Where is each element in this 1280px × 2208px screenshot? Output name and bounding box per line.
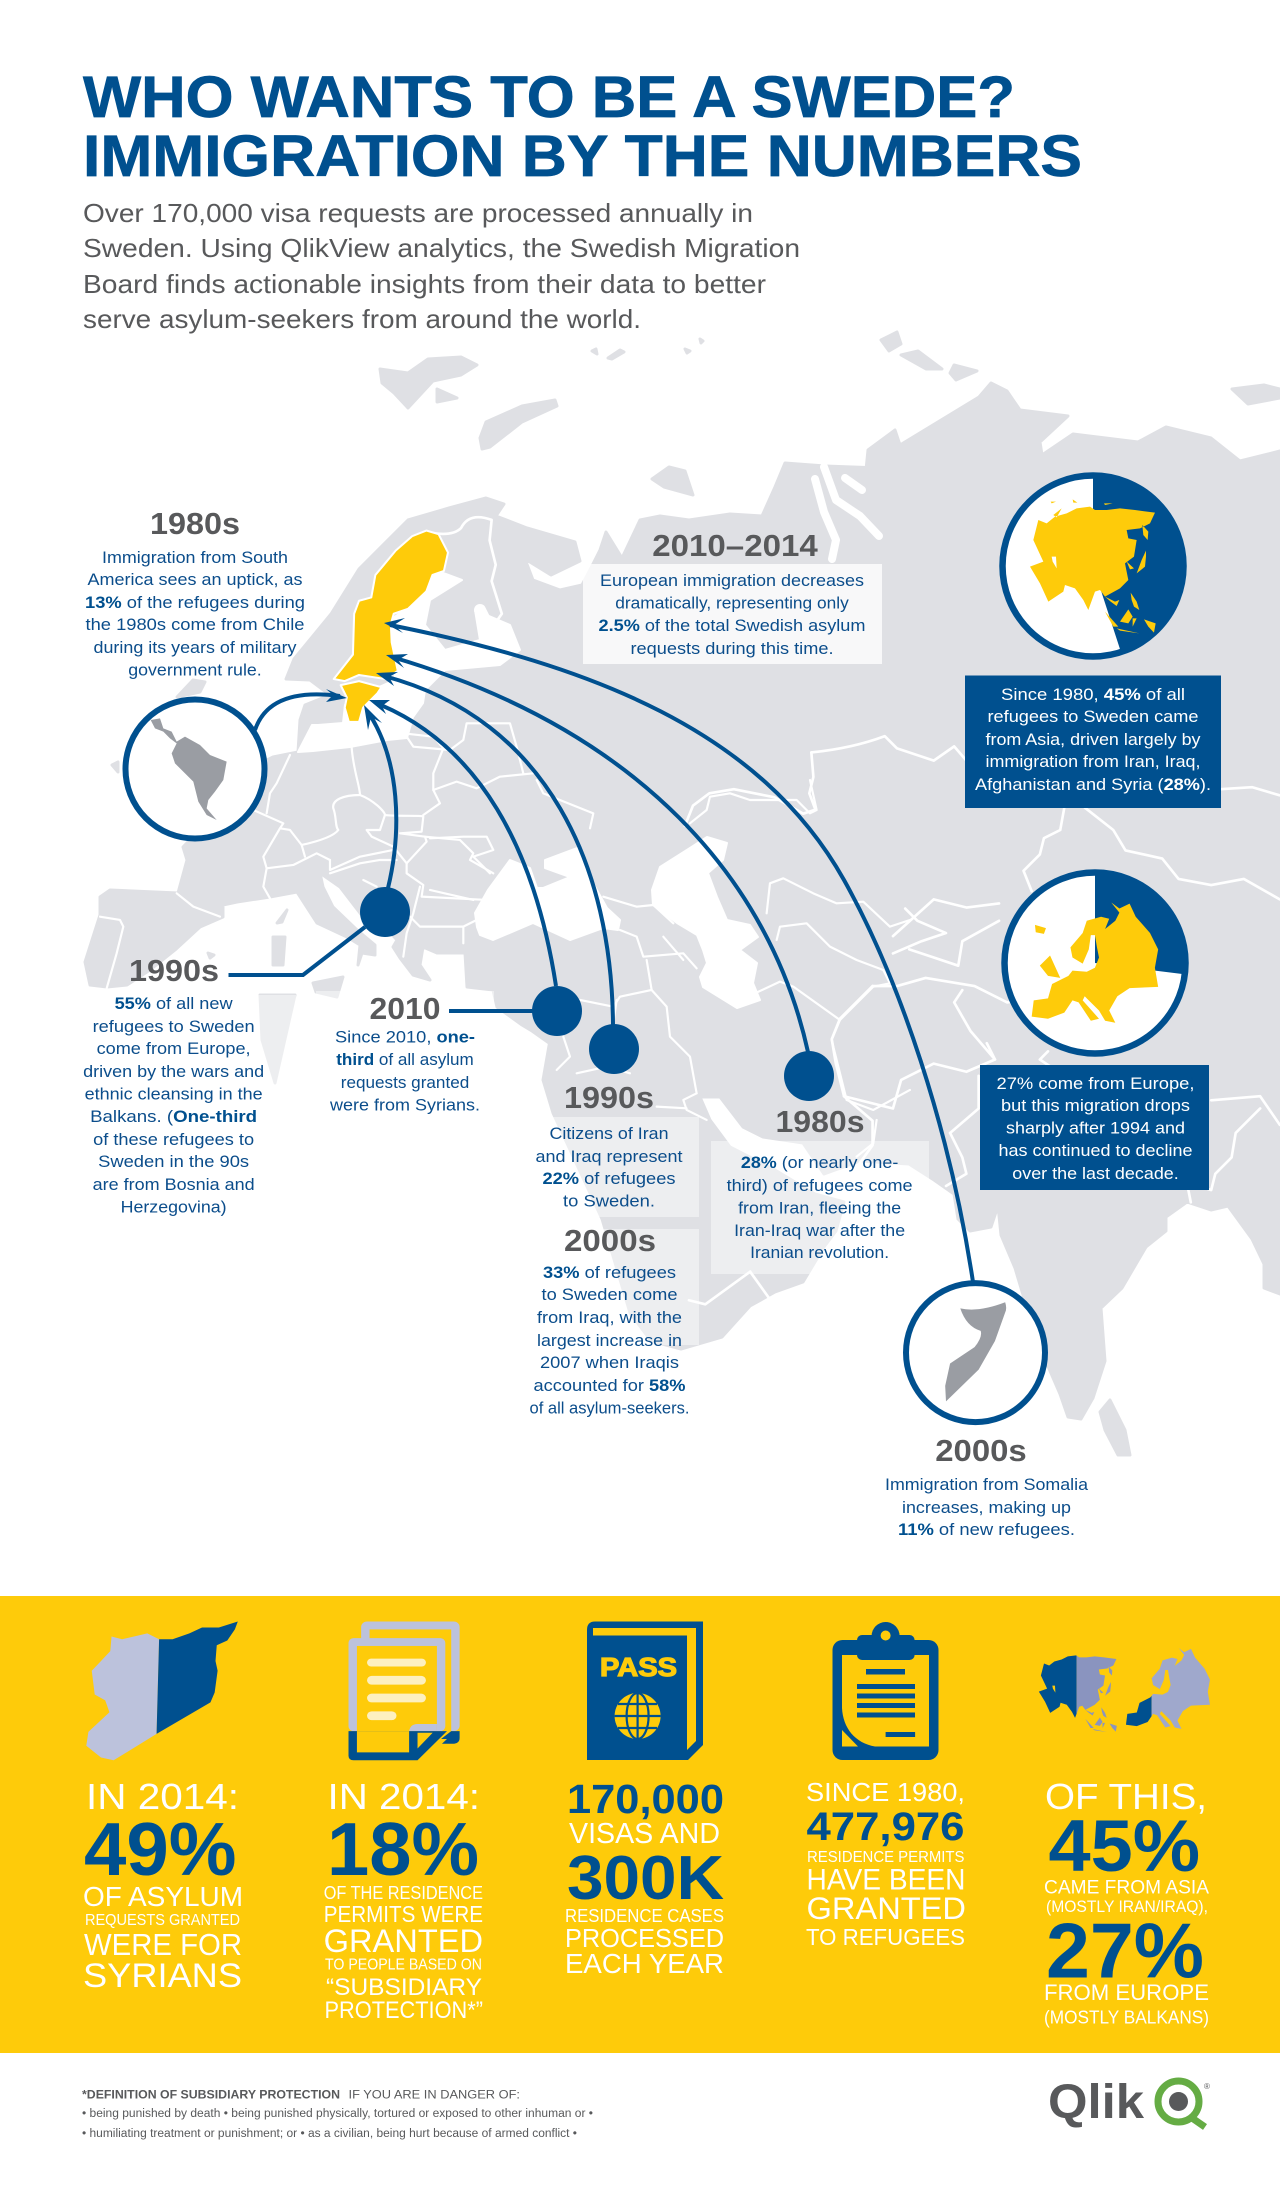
stat: Residence permits 477,976: SINCE 1980, — [806, 1777, 965, 1807]
stat: Subsidiary protection 18%: PROTECTION*” — [324, 1997, 483, 2024]
arrow: 2000s Somalia — [390, 625, 973, 1282]
stat: Asia 45% and Europe 27%: 45% — [1048, 1806, 1200, 1887]
stat: Syrians 49%: OF ASYLUM — [83, 1881, 243, 1912]
label: 2000s Somalia: increases, making up — [902, 1498, 1071, 1517]
logo: Qlik: Qlik — [1048, 2076, 1144, 2129]
label: 1990s Europe: refugees to Sweden — [93, 1017, 255, 1036]
label: 1990s Europe: 55% of all new — [115, 994, 233, 1013]
label: 1980s South America: America sees an uptick, as — [88, 570, 302, 589]
label: 1980s Iran: Iranian revolution. — [750, 1243, 889, 1262]
label: 1980s Iran: from Iran, fleeing the — [738, 1198, 901, 1218]
label: 2000s Iraq: of all asylum-seekers. — [530, 1398, 690, 1418]
title — [83, 65, 1082, 189]
label: 2010 Syria: requests granted — [341, 1073, 469, 1092]
label: 1990s Iran and Iraq: 1990s — [564, 1080, 654, 1115]
label: 1980s South America: government rule. — [128, 660, 262, 680]
stat: Subsidiary protection 18%: 18% — [327, 1807, 479, 1891]
label: 2000s Iraq: largest increase in — [537, 1331, 682, 1350]
label: 1990s Iran and Iraq — [536, 1080, 683, 1210]
callout: Asia: refugees to Sweden came — [988, 707, 1198, 726]
icon: Asia and Europe maps — [1039, 1648, 1210, 1732]
stat: Asia 45% and Europe 27% — [1044, 1776, 1209, 2028]
label: 1990s Europe: ethnic cleansing in the — [85, 1084, 263, 1104]
arrow: 1980s Iran — [392, 657, 808, 1052]
label: 2010 Syria: Since 2010, one- — [335, 1028, 475, 1046]
label: 1980s Iran: 28% (or nearly one- — [741, 1153, 898, 1172]
stat: Asia 45% and Europe 27%: 27% — [1046, 1906, 1204, 1994]
stat: Subsidiary protection 18% — [324, 1776, 483, 2024]
Sweden highlighted in yellow — [334, 531, 448, 722]
label: 1990s Europe: driven by the wars and — [83, 1062, 264, 1081]
stat: Subsidiary protection 18%: “SUBSIDIARY — [326, 1974, 482, 2001]
callout: Europe: but this migration drops — [1001, 1096, 1190, 1115]
country borders: Asia — [685, 736, 1280, 936]
stat: Syrians 49%: 49% — [84, 1807, 236, 1891]
footnote: definition of subsidiary protection: • being punished by death • being punished physically, tortured or exposed to other inhuman or • — [82, 2108, 593, 2120]
stat: Visas processed: RESIDENCE CASES — [565, 1906, 724, 1926]
label: 2000s Somalia: 11% of new refugees. — [898, 1520, 1075, 1539]
label: 2000s Iraq: accounted for 58% — [534, 1376, 686, 1395]
translucent text panels — [100, 564, 929, 1345]
label: 2010-2014: 2010–2014 — [652, 528, 819, 563]
stat: Visas processed: VISAS AND — [569, 1818, 720, 1850]
connector: 1990s label — [228, 927, 365, 975]
label: 1980s South America: Immigration from South — [102, 548, 288, 567]
pie chart: Europe 27% — [1004, 872, 1186, 1054]
Somalia circle — [906, 1283, 1045, 1422]
title: WHO WANTS TO BE A SWEDE? — [83, 65, 1015, 130]
stat: Subsidiary protection 18%: TO PEOPLE BASED ON — [325, 1957, 482, 1974]
stat: Residence permits 477,976: HAVE BEEN — [806, 1864, 966, 1896]
callout: Asia: Afghanistan and Syria ( 28%). — [975, 775, 1211, 794]
stat: Residence permits 477,976: RESIDENCE PERMITS — [807, 1849, 964, 1866]
stat: Subsidiary protection 18%: IN 2014: — [328, 1776, 480, 1817]
label: 2000s Somalia — [885, 1433, 1089, 1539]
label: 2000s Somalia: 2000s — [935, 1433, 1027, 1468]
arrow: South America — [255, 694, 340, 730]
stat: Residence permits 477,976 — [806, 1777, 966, 1950]
callout: Europe: has continued to decline — [998, 1141, 1192, 1160]
label: 1980s South America: during its years of military — [94, 638, 297, 657]
label: 2000s Somalia: Immigration from Somalia — [885, 1475, 1089, 1494]
label: 2010-2014: European immigration decreases — [600, 571, 864, 590]
label: 2010-2014: 2.5% of the total Swedish asylum — [598, 616, 866, 635]
intro text: Board finds actionable insights from their data to better — [83, 269, 766, 299]
icon: passport: PASS — [600, 1652, 677, 1682]
intro text: Sweden. Using QlikView analytics, the Swedish Migration — [83, 233, 800, 263]
arrow: 1990s Europe — [368, 712, 396, 888]
country borders: central Europe — [100, 723, 533, 988]
intro text: serve asylum-seekers from around the world. — [83, 304, 641, 334]
label: 1980s Iran: 1980s — [776, 1104, 864, 1139]
stat: Residence permits 477,976: GRANTED — [806, 1890, 966, 1926]
label: 1990s Europe: come from Europe, — [97, 1039, 251, 1058]
callout: Asia: from Asia, driven largely by — [986, 730, 1201, 749]
label: 1980s Iran — [727, 1104, 913, 1262]
stat: Syrians 49%: SYRIANS — [83, 1957, 242, 1995]
footnote: definition of subsidiary protection — [82, 2090, 593, 2140]
country borders: South Asia — [689, 909, 1280, 1304]
stat: Visas processed: EACH YEAR — [565, 1948, 724, 1979]
callout: Asia: Since 1980, 45% of all — [1001, 685, 1185, 704]
label: 1990s Europe: Herzegovina) — [121, 1198, 227, 1217]
label: 1990s Iran and Iraq: and Iraq represent — [536, 1147, 683, 1166]
stat: Residence permits 477,976: TO REFUGEES — [806, 1924, 965, 1950]
label: 1980s Iran: Iran-Iraq war after the — [734, 1221, 905, 1240]
arrowheads — [326, 618, 408, 730]
label: 2000s Iraq: from Iraq, with the — [537, 1308, 682, 1327]
title: IMMIGRATION BY THE NUMBERS — [83, 124, 1082, 189]
callout: Asia: immigration from Iran, Iraq, — [986, 752, 1200, 771]
label: 1990s Europe: 1990s — [129, 953, 219, 988]
South America circle — [126, 700, 264, 838]
label: 2010-2014 — [598, 528, 866, 658]
intro text — [83, 198, 800, 334]
footnote: definition of subsidiary protection: IF YOU ARE IN DANGER OF: — [348, 2090, 520, 2102]
stat: Subsidiary protection 18%: PERMITS WERE — [324, 1901, 483, 1927]
label: 1980s South America: 13% of the refugees during — [85, 593, 305, 612]
label: 2000s Iraq — [530, 1223, 690, 1418]
callout: Europe — [980, 1065, 1209, 1190]
stat: Residence permits 477,976: 477,976 — [806, 1805, 964, 1849]
stat: Asia 45% and Europe 27%: (MOSTLY BALKANS) — [1044, 2008, 1209, 2028]
stat: Asia 45% and Europe 27%: CAME FROM ASIA — [1044, 1878, 1209, 1898]
label: 2000s Iraq: 33% of refugees — [543, 1263, 676, 1282]
panel: yellow statistics band — [0, 1596, 1280, 2053]
stat: Visas processed: 300K — [567, 1844, 724, 1913]
stat: Visas processed: 170,000 — [567, 1776, 724, 1822]
callout: Europe: over the last decade. — [1012, 1164, 1179, 1183]
stat: Subsidiary protection 18%: OF THE RESIDENCE — [324, 1883, 483, 1903]
stat: Syrians 49%: IN 2014: — [86, 1776, 239, 1817]
stat: Asia 45% and Europe 27%: FROM EUROPE — [1044, 1980, 1209, 2005]
label: 2010 Syria — [329, 991, 480, 1115]
label: 2010 Syria: were from Syrians. — [329, 1096, 480, 1115]
callout: Asia — [965, 676, 1221, 808]
logo: Qlik — [1048, 2076, 1210, 2129]
footnote: definition of subsidiary protection: *DEFINITION OF SUBSIDIARY PROTECTION — [82, 2090, 340, 2102]
label: 1990s Europe: Balkans. ( One-third — [90, 1107, 257, 1126]
footnote: definition of subsidiary protection: • humiliating treatment or punishment; or • as a civilian, being hurt because of armed conflict • — [82, 2128, 577, 2140]
label: 2000s Iraq: to Sweden come — [542, 1285, 678, 1304]
world map background — [85, 332, 1280, 1455]
label: 2010 Syria: third of all asylum — [336, 1050, 474, 1069]
country borders: north Europe — [432, 517, 502, 634]
icon: passport — [587, 1622, 703, 1760]
origin dots — [360, 887, 834, 1101]
stat: Subsidiary protection 18%: GRANTED — [324, 1923, 483, 1959]
icon: clipboard — [832, 1622, 938, 1760]
seas — [298, 570, 760, 1008]
country borders: Caucasus and Middle East — [430, 780, 910, 1157]
label: 2010 Syria: 2010 — [370, 991, 440, 1026]
arrow: 2010 Syria — [376, 703, 556, 986]
label: 2010-2014: requests during this time. — [630, 639, 834, 658]
stat: Syrians 49%: REQUESTS GRANTED — [85, 1912, 240, 1929]
label: 1990s Iran and Iraq: 22% of refugees — [542, 1169, 676, 1188]
stat: Asia 45% and Europe 27%: (MOSTLY IRAN/IRAQ), — [1046, 1897, 1208, 1916]
label: 1990s Europe: of these refugees to — [93, 1130, 254, 1149]
label: 1980s Iran: third) of refugees come — [727, 1176, 913, 1195]
connector: 2010 label — [449, 1009, 533, 1013]
arrows from origin regions to Sweden — [228, 618, 973, 1282]
label: 2000s Iraq: 2007 when Iraqis — [540, 1353, 679, 1372]
label: 1980s South America — [85, 506, 305, 680]
arrow: 1990s Iran and Iraq — [384, 676, 613, 1025]
stat: Visas processed — [565, 1776, 724, 1979]
callout: Europe: 27% come from Europe, — [996, 1074, 1194, 1093]
callout: Europe: sharply after 1994 and — [1006, 1118, 1185, 1138]
stat: Asia 45% and Europe 27%: OF THIS, — [1045, 1776, 1207, 1817]
pie chart: Asia 45% — [1002, 476, 1184, 656]
label: 1990s Europe: Sweden in the 90s — [98, 1152, 249, 1171]
stat: Syrians 49% — [83, 1776, 243, 1995]
stat: Visas processed: PROCESSED — [565, 1925, 724, 1953]
label: 1990s Europe — [83, 953, 264, 1217]
label: 1980s South America: 1980s — [150, 506, 240, 541]
logo: Qlik: ® — [1204, 2082, 1210, 2091]
label: 2010-2014: dramatically, representing only — [615, 594, 849, 613]
label: 1990s Iran and Iraq: Citizens of Iran — [550, 1124, 668, 1143]
label: 1980s South America: the 1980s come from Chile — [86, 615, 304, 634]
icon: Syria map — [86, 1622, 238, 1760]
stat: Syrians 49%: WERE FOR — [84, 1927, 242, 1962]
intro text: Over 170,000 visa requests are processed annually in — [83, 198, 753, 228]
label: 1990s Europe: are from Bosnia and — [93, 1175, 255, 1194]
label: 2000s Iraq: 2000s — [564, 1223, 656, 1258]
icon: residence permit documents — [349, 1622, 460, 1760]
label: 1990s Iran and Iraq: to Sweden. — [563, 1192, 655, 1210]
